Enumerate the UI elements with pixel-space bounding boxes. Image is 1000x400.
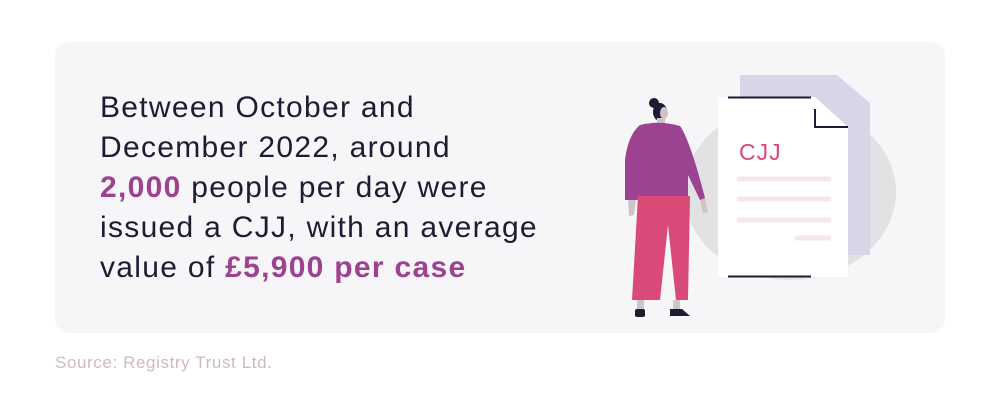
text block: main statement: value of £5,900 per case [100, 251, 466, 284]
text block: main statement: Between October and [100, 91, 415, 124]
front document [718, 97, 848, 277]
text block: main statement [100, 91, 538, 284]
blob background [684, 104, 896, 280]
back document [740, 75, 870, 255]
front document: CJJ [739, 139, 782, 165]
text block: main statement: issued a CJJ, with an average [100, 211, 538, 244]
text block: main statement: December 2022, around [100, 131, 451, 164]
panel: card [55, 42, 945, 333]
person [625, 98, 708, 317]
source note: Source: Registry Trust Ltd. [55, 353, 272, 372]
text block: main statement: 2,000 people per day were [100, 171, 488, 204]
